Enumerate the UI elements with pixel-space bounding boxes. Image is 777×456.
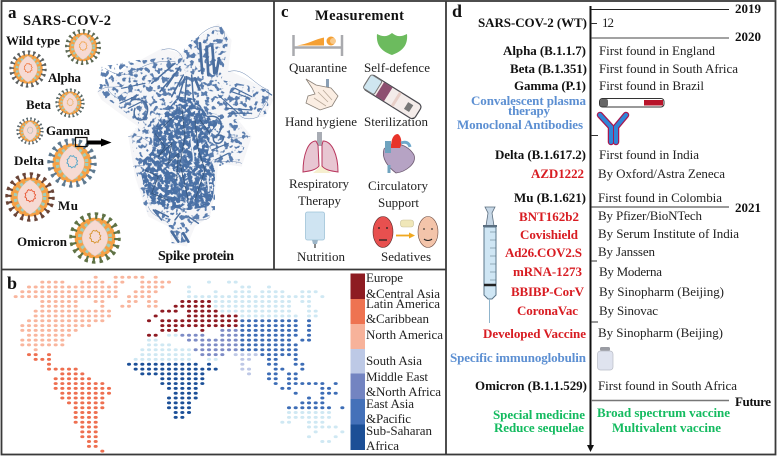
label: respiratory therapy: Therapy bbox=[298, 193, 342, 208]
timeline descriptions: First found in Colombia bbox=[598, 190, 722, 205]
red vaccine labels: Developed Vaccine bbox=[483, 326, 586, 341]
virus: mu bbox=[6, 173, 54, 221]
virus: wild type bbox=[66, 30, 100, 64]
label: circulatory support: Support bbox=[378, 195, 419, 210]
heading: SARS-COV-2: SARS-COV-2 bbox=[23, 13, 111, 29]
variant names: Beta (B.1.351) bbox=[510, 61, 587, 76]
variant names: Mu (B.1.621) bbox=[514, 190, 586, 205]
year marker 2021: 2021 bbox=[735, 200, 761, 215]
map dots: light blue territories bbox=[136, 282, 343, 442]
legend labels: &North Africa bbox=[366, 384, 441, 399]
zoom box and arrow to spike protein bbox=[76, 138, 112, 146]
map dots: Latin America and Caribbean bbox=[29, 355, 110, 451]
icon: antibody bbox=[600, 115, 626, 142]
legend labels: &Caribbean bbox=[366, 311, 430, 326]
legend labels: Middle East bbox=[366, 369, 428, 384]
map dots: Europe and Central Asia bbox=[149, 301, 236, 335]
label: sedatives: Sedatives bbox=[381, 249, 431, 264]
legend labels: Africa bbox=[366, 438, 399, 453]
panel b: world dot map and legend bbox=[7, 270, 443, 453]
timeline descriptions: 12 bbox=[602, 15, 614, 30]
label: spike protein: Spike protein bbox=[158, 249, 234, 264]
timeline descriptions: By Moderna bbox=[599, 264, 662, 279]
label: self-defence: Self-defence bbox=[364, 60, 430, 75]
green future labels: Broad spectrum vaccine bbox=[597, 405, 730, 420]
green future labels: Multivalent vaccine bbox=[612, 420, 721, 435]
icon: sedatives faces bbox=[373, 216, 438, 248]
timeline descriptions: By Serum Institute of India bbox=[598, 226, 739, 241]
virus: delta bbox=[48, 139, 96, 187]
timeline descriptions: By Pfizer/BioNTech bbox=[598, 208, 702, 223]
icon: lungs bbox=[303, 132, 338, 173]
virus: gamma bbox=[17, 118, 43, 144]
year marker 2019: 2019 bbox=[735, 1, 762, 16]
red vaccine labels: BNT162b2 bbox=[519, 209, 579, 224]
label: circulatory support bbox=[368, 178, 428, 210]
icon: sterilization spray bbox=[363, 74, 422, 120]
panel b label: b bbox=[7, 273, 17, 293]
red vaccine labels: Ad26.COV2.S bbox=[505, 245, 582, 260]
legend labels: Europe bbox=[366, 270, 403, 285]
variant names bbox=[475, 15, 587, 393]
dot map bbox=[16, 277, 343, 451]
label: circulatory support: Circulatory bbox=[368, 178, 428, 193]
label: nutrition: Nutrition bbox=[297, 249, 346, 264]
legend labels bbox=[366, 270, 443, 453]
timeline descriptions: By Janssen bbox=[598, 244, 656, 259]
timeline descriptions bbox=[598, 15, 739, 393]
virus: beta bbox=[56, 89, 84, 117]
blue therapy labels bbox=[450, 93, 587, 365]
icon: quarantine bed bbox=[293, 35, 342, 56]
icon: blood tube bbox=[600, 98, 664, 107]
legend labels: Latin America bbox=[366, 296, 440, 311]
icon: heart bbox=[383, 134, 414, 173]
legend labels: Sub-Saharan bbox=[366, 423, 432, 438]
label: sterilization: Sterilization bbox=[364, 114, 428, 129]
timeline descriptions: First found in South Africa bbox=[598, 378, 737, 393]
blue therapy labels: Monoclonal Antibodies bbox=[457, 117, 583, 132]
timeline descriptions: By Sinopharm (Beijing) bbox=[598, 325, 723, 340]
icon: hand hygiene bbox=[306, 79, 338, 110]
label: respiratory therapy bbox=[289, 176, 350, 208]
map dots: Middle East and North Africa bbox=[182, 330, 236, 355]
icon: immunoglobulin jar bbox=[598, 347, 613, 370]
panel d: timeline bbox=[450, 1, 771, 452]
legend labels: East Asia bbox=[366, 396, 414, 411]
variant names: Omicron (B.1.1.529) bbox=[475, 378, 587, 393]
label: alpha: Alpha bbox=[48, 70, 82, 85]
red vaccine labels: AZD1222 bbox=[531, 166, 584, 181]
future marker: Future bbox=[735, 394, 771, 409]
timeline descriptions: First found in England bbox=[599, 43, 716, 58]
legend labels: South Asia bbox=[366, 353, 422, 368]
blue therapy labels: Specific immunoglobulin bbox=[450, 350, 587, 365]
label: mu: Mu bbox=[58, 198, 78, 213]
timeline descriptions: First found in India bbox=[599, 147, 699, 162]
map dots: North America bbox=[16, 277, 170, 350]
timeline descriptions: By Oxford/Astra Zeneca bbox=[598, 166, 725, 181]
red vaccine labels bbox=[483, 166, 586, 341]
virus: alpha bbox=[10, 51, 46, 87]
timeline descriptions: By Sinovac bbox=[599, 303, 658, 318]
label: quarantine: Quarantine bbox=[289, 60, 347, 75]
icon: nutrition IV bag bbox=[306, 212, 324, 248]
label: respiratory therapy: Respiratory bbox=[289, 176, 350, 191]
spike protein structure bbox=[97, 23, 273, 247]
red vaccine labels: CoronaVac bbox=[517, 303, 578, 318]
timeline descriptions: By Sinopharm (Beijing) bbox=[599, 284, 724, 299]
variant names: Gamma (P.1) bbox=[514, 78, 586, 93]
panel a label: a bbox=[8, 3, 17, 22]
heading: measurement: Measurement bbox=[315, 8, 404, 24]
legend labels: North America bbox=[366, 327, 443, 342]
label: hand hygiene: Hand hygiene bbox=[285, 114, 357, 129]
timeline axis with arrow bbox=[587, 6, 598, 452]
virus: omicron bbox=[71, 214, 119, 262]
map dots: East Asia and Pacific bbox=[242, 321, 343, 408]
variant names: SARS-COV-2 (WT) bbox=[478, 15, 587, 30]
blue therapy labels: Convalescent plasma bbox=[471, 93, 586, 108]
icon: self-defence mask bbox=[377, 33, 407, 55]
red vaccine labels: BBIBP-CorV bbox=[511, 284, 585, 299]
panel c label: c bbox=[281, 2, 289, 21]
legend color bar bbox=[350, 274, 365, 450]
year marker 2020: 2020 bbox=[735, 29, 761, 44]
icon: syringe bbox=[483, 207, 497, 323]
variant names: Delta (B.1.617.2) bbox=[495, 147, 586, 162]
green future labels: Special medicine bbox=[493, 407, 585, 422]
legend labels: &Central Asia bbox=[366, 286, 440, 301]
label: beta: Beta bbox=[26, 97, 52, 112]
label: gamma: Gamma bbox=[46, 123, 90, 138]
red vaccine labels: Covishield bbox=[520, 227, 579, 242]
panel c: measurement bbox=[281, 2, 438, 264]
green future labels bbox=[493, 405, 730, 435]
blue therapy labels: therapy bbox=[508, 103, 550, 118]
label: omicron: Omicron bbox=[17, 234, 68, 249]
label: delta: Delta bbox=[14, 153, 44, 168]
red vaccine labels: mRNA-1273 bbox=[513, 264, 582, 279]
variant names: Alpha (B.1.1.7) bbox=[503, 43, 586, 58]
panel a: SARS-COV-2 variants and spike protein bbox=[6, 3, 273, 264]
timeline descriptions: First found in South Africa bbox=[599, 61, 738, 76]
panel d label: d bbox=[452, 1, 462, 21]
map dots: South Asia bbox=[236, 355, 256, 374]
legend labels: &Pacific bbox=[366, 411, 411, 426]
timeline descriptions: First found in Brazil bbox=[599, 78, 704, 93]
label: wild type: Wild type bbox=[6, 33, 60, 48]
green future labels: Reduce sequelae bbox=[494, 420, 584, 435]
map dots: Sub-Saharan Africa bbox=[129, 364, 216, 417]
